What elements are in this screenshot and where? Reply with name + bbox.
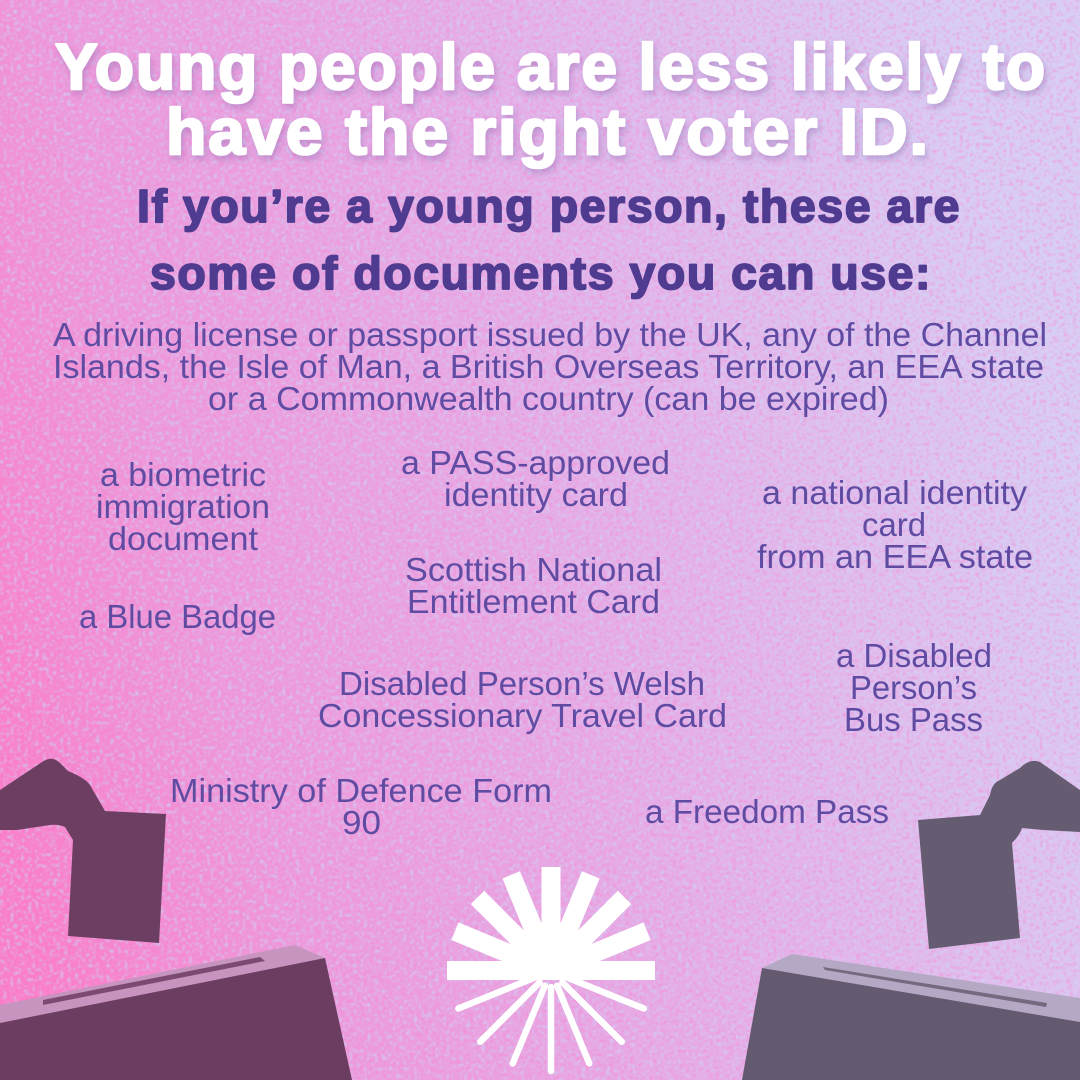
icon: left hand holding ballot — [0, 759, 166, 943]
document: Disabled Person's Bus Pass: Bus Pass — [844, 701, 983, 738]
document: Scottish National Entitlement Card: Scottish National — [405, 551, 662, 588]
document: national identity card: from an EEA state — [757, 538, 1033, 575]
document: Disabled Person's Welsh Concessionary Travel Card — [318, 665, 727, 734]
icon: white sunburst logo — [447, 867, 655, 1071]
document: biometric immigration document: a biometric — [100, 456, 266, 493]
document: Disabled Person's Bus Pass: Person’s — [850, 669, 977, 706]
document: Disabled Person's Bus Pass: a Disabled — [836, 637, 992, 674]
document: Disabled Person's Welsh Concessionary Travel Card: Disabled Person’s Welsh — [339, 665, 705, 702]
document: Disabled Person's Bus Pass — [836, 637, 992, 738]
document: Disabled Person's Welsh Concessionary Travel Card: Concessionary Travel Card — [318, 697, 727, 734]
text block: driving license or passport: A driving license or passport issued by the UK, any of the Channel — [53, 316, 1047, 353]
text block: driving license or passport: or a Commonwealth country (can be expired) — [208, 380, 889, 417]
subtitle — [137, 180, 961, 299]
document: PASS-approved identity card: a PASS-approved — [401, 444, 670, 481]
title: Young people are less likely to — [55, 30, 1047, 103]
text block: driving license or passport: Islands, the Isle of Man, a British Overseas Territory, an EEA state — [53, 348, 1044, 385]
icon: right ballot box — [742, 954, 1080, 1080]
document: national identity card: a national identity — [762, 474, 1028, 511]
document: Ministry of Defence Form 90 — [170, 772, 552, 841]
document: Ministry of Defence Form 90: 90 — [342, 804, 381, 841]
document: biometric immigration document — [96, 456, 270, 557]
document: Freedom Pass: a Freedom Pass — [645, 793, 889, 830]
subtitle: some of documents you can use: — [150, 247, 932, 299]
document: Scottish National Entitlement Card: Entitlement Card — [407, 583, 660, 620]
document: national identity card: card — [862, 506, 926, 543]
title: have the right voter ID. — [166, 95, 930, 168]
document: biometric immigration document: immigration — [96, 488, 270, 525]
text block: driving license or passport — [53, 316, 1047, 417]
subtitle: If you’re a young person, these are — [137, 180, 961, 232]
title — [55, 30, 1047, 168]
document: PASS-approved identity card: identity card — [444, 476, 628, 513]
document: PASS-approved identity card — [401, 444, 670, 513]
document: Scottish National Entitlement Card — [405, 551, 662, 620]
document: Blue Badge: a Blue Badge — [79, 598, 276, 635]
document: Ministry of Defence Form 90: Ministry of Defence Form — [170, 772, 552, 809]
document: biometric immigration document: document — [108, 520, 258, 557]
icon: left ballot box — [0, 945, 352, 1080]
document: national identity card — [757, 474, 1033, 575]
icon: right hand holding ballot — [918, 761, 1080, 949]
